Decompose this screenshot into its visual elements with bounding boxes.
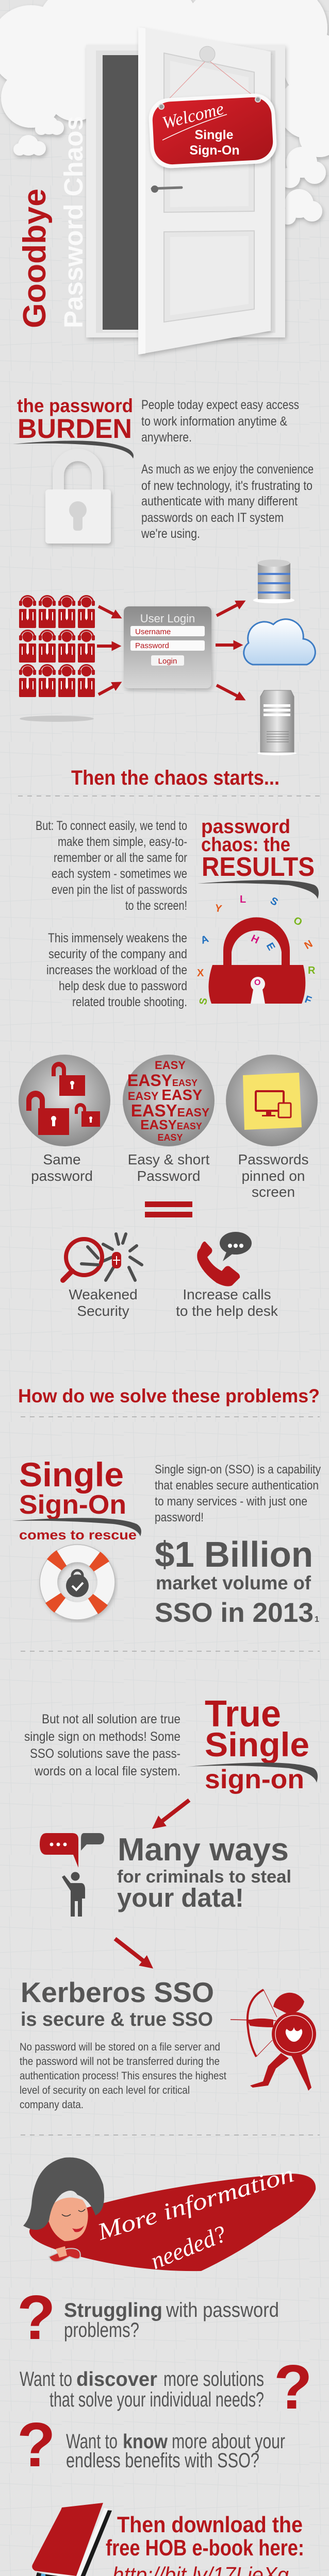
icon: red lock with letters: S xyxy=(268,895,280,908)
text: chaos explanation: This immensely weakens the xyxy=(48,931,187,945)
text: chaos explanation: related trouble shooting. xyxy=(72,995,187,1009)
title: Goodbye Password Chaos xyxy=(17,116,88,328)
text: chaos explanation: But: To connect easily, we tend to xyxy=(36,819,187,833)
heading: True Single sign-on: True xyxy=(205,1693,281,1735)
heading: True Single sign-on xyxy=(188,1693,318,1794)
text: password burden: People today expect easy access xyxy=(141,398,299,412)
banner: More information needed: needed? xyxy=(147,2221,230,2274)
icon: red lock with letters: E xyxy=(264,941,277,953)
heading: Many ways for criminals: for criminals to steal xyxy=(117,1867,291,1887)
labels: pinned on xyxy=(241,1168,305,1184)
icon: red lock with letters: X xyxy=(197,968,204,979)
banner: More information needed xyxy=(23,2157,316,2274)
heading: password chaos the RESULTS xyxy=(198,816,319,899)
icon: red lock with letters: F xyxy=(303,994,313,1007)
stat: $1 Billion: market volume of xyxy=(156,1572,311,1594)
text: chaos explanation: help desk due to password xyxy=(59,979,187,993)
stat: $1 Billion: 1 xyxy=(315,1615,319,1624)
icon: red e-book xyxy=(32,2503,112,2576)
icon: server xyxy=(257,690,297,755)
question: discover: more solutions xyxy=(163,2368,264,2391)
heading: Single Sign-On comes to rescue: Sign-On xyxy=(19,1490,126,1520)
text: not all solutions: words on a local file system. xyxy=(34,1764,180,1778)
login box: Login xyxy=(158,657,177,666)
heading: Single Sign-On comes to rescue xyxy=(12,1455,141,1543)
icon: red lock with letters: O xyxy=(254,978,260,987)
heading: True Single sign-on: sign-on xyxy=(205,1765,304,1794)
question: struggling: ? xyxy=(17,2282,56,2352)
question: struggling xyxy=(17,2282,279,2352)
text: password burden: to work information anytime & xyxy=(141,414,287,429)
heading: the password BURDEN: BURDEN xyxy=(18,414,132,444)
people grid xyxy=(19,596,95,722)
heading: True Single sign-on: Single xyxy=(205,1725,309,1764)
welcome sign: Sign-On xyxy=(189,143,240,158)
login box: Password xyxy=(135,641,169,650)
text: password burden: we're using. xyxy=(141,527,200,541)
icon: red lock with letters: N xyxy=(303,938,315,952)
call to action: download e-book xyxy=(106,2512,304,2576)
text: SSO definition: to many services - with just one xyxy=(155,1495,307,1509)
sign knob and strings xyxy=(161,46,258,107)
login box: Username xyxy=(135,628,171,636)
text: Kerberos explanation: No password will be stored on a file server and xyxy=(20,2041,220,2053)
arrows out of login xyxy=(216,603,241,698)
arrow: down-right xyxy=(115,1939,148,1964)
icon: easy words: EASYEASY xyxy=(140,1117,202,1132)
icon: red lock with letters: L xyxy=(240,894,246,905)
welcome sign xyxy=(148,93,277,169)
heading: Many ways for criminals xyxy=(117,1832,291,1912)
icon: easy words xyxy=(123,1055,215,1146)
text: Kerberos explanation: authentication process! This ensures the highest xyxy=(20,2070,226,2082)
labels: consequences xyxy=(69,1286,278,1319)
woman xyxy=(23,2157,104,2262)
clouds xyxy=(0,0,329,225)
welcome sign: Single xyxy=(194,128,234,142)
text: not all solutions xyxy=(24,1712,180,1778)
text: Kerberos explanation: the password will not be transferred during the xyxy=(20,2056,220,2067)
labels: consequences: Weakened xyxy=(69,1286,138,1302)
icon: red lock with letters xyxy=(197,894,316,1007)
question: know: Want to xyxy=(66,2430,118,2453)
icon: database xyxy=(253,560,294,603)
icon: red lock with letters: Y xyxy=(214,903,223,915)
labels: consequences: Increase calls xyxy=(183,1286,271,1302)
login box xyxy=(124,606,211,688)
icon: person with speech bubbles xyxy=(40,1833,104,1917)
heading: the password BURDEN xyxy=(13,395,134,459)
question: know xyxy=(17,2410,285,2480)
question: struggling: problems? xyxy=(64,2319,139,2342)
text: SSO definition xyxy=(155,1463,321,1524)
heading: Kerberos SSO: Kerberos SSO xyxy=(21,1976,214,2008)
call to action: download e-book: Then download the xyxy=(117,2512,303,2537)
door slab xyxy=(138,27,271,354)
icon: easy words: EASY xyxy=(155,1059,186,1072)
text: chaos explanation: remember or all the same for xyxy=(54,851,187,865)
icon: red lock with letters: O xyxy=(291,914,304,928)
heading: Many ways for criminals: your data! xyxy=(117,1883,244,1912)
stat: $1 Billion: SSO in 2013 xyxy=(155,1598,314,1628)
question: struggling: with password xyxy=(166,2299,279,2321)
icon: phone with speech bubble xyxy=(197,1232,252,1286)
heading: password chaos the RESULTS: chaos: the xyxy=(201,834,290,856)
icon: easy words: EASY EASY xyxy=(128,1087,202,1104)
text: not all solutions: single sign on methods! Some xyxy=(24,1730,180,1744)
text: chaos explanation: increases the workload of the xyxy=(46,963,187,977)
text: not all solutions: SSO solutions save the pass- xyxy=(30,1747,180,1761)
icon: red lock with letters: H xyxy=(249,933,261,946)
labels: consequences: to the help desk xyxy=(176,1303,278,1319)
door frame xyxy=(86,45,285,337)
equals sign xyxy=(145,1201,192,1217)
labels: Passwords xyxy=(238,1151,308,1167)
text: Kerberos explanation xyxy=(20,2041,226,2111)
text: chaos explanation xyxy=(36,819,187,1009)
icon: red lock with letters: R xyxy=(308,965,316,976)
question: know: know xyxy=(123,2431,168,2453)
heading: the password BURDEN: the password xyxy=(17,395,133,416)
icon: spartan archer xyxy=(231,1990,316,2091)
icon: weakened security (magnifier and bug) xyxy=(63,1234,142,1280)
icon: sticky note with monitor xyxy=(226,1055,318,1146)
text: password burden xyxy=(141,398,314,541)
text: chaos explanation: to the screen! xyxy=(125,899,187,913)
panel: three password habits xyxy=(19,1055,318,1200)
text: chaos explanation: make them simple, easy-to- xyxy=(58,835,187,849)
question: discover xyxy=(20,2352,312,2422)
text: password burden: authenticate with many different xyxy=(141,494,298,509)
question: discover: ? xyxy=(274,2352,312,2422)
heading: Single Sign-On comes to rescue: Single xyxy=(19,1455,124,1494)
heading: Then the chaos starts: Then the chaos starts... xyxy=(71,767,279,789)
icon: red lock with letters: A xyxy=(199,933,210,946)
heading: Many ways for criminals: Many ways xyxy=(118,1832,289,1868)
title: Goodbye Password Chaos: Password Chaos xyxy=(59,116,88,328)
question: know: ? xyxy=(17,2410,56,2480)
icon: red lock with letters: S xyxy=(198,997,210,1006)
text: password burden: anywhere. xyxy=(141,430,192,445)
icon: cloud xyxy=(244,619,315,665)
icon: easy words: EASYEASY xyxy=(131,1101,209,1120)
labels: password xyxy=(31,1168,93,1184)
icon: lifebuoy xyxy=(40,1545,115,1620)
text: password burden: passwords on each IT system xyxy=(141,511,284,525)
hero: clouds and door xyxy=(0,0,329,354)
heading: password chaos the RESULTS: RESULTS xyxy=(202,852,315,882)
title: Goodbye Password Chaos: Goodbye xyxy=(17,189,53,328)
heading: Single Sign-On comes to rescue: comes to rescue xyxy=(19,1527,137,1543)
labels: consequences: Security xyxy=(77,1303,129,1319)
stat: $1 Billion: $1 Billion xyxy=(155,1534,313,1574)
question: discover: Want to xyxy=(20,2368,72,2391)
text: chaos explanation: even pin the list of passwords xyxy=(52,883,187,897)
text: Kerberos explanation: company data. xyxy=(20,2099,84,2111)
text: Kerberos explanation: level of security on each level for critical xyxy=(20,2084,190,2096)
heading: password chaos the RESULTS: password xyxy=(201,816,290,838)
login box: User Login xyxy=(140,612,195,625)
heading: How do we solve these problems: How do we solve these problems? xyxy=(18,1385,320,1406)
labels xyxy=(31,1151,308,1200)
labels: Password xyxy=(137,1168,200,1184)
question: discover: discover xyxy=(76,2368,157,2391)
icon: easy words: EASYEASY xyxy=(127,1071,198,1090)
stat: $1 Billion xyxy=(155,1534,319,1628)
icon: same password locks xyxy=(19,1055,110,1146)
banner: More information needed: More information xyxy=(94,2160,297,2245)
labels: Same xyxy=(43,1151,81,1167)
heading: Kerberos SSO xyxy=(21,1976,214,2030)
icon: padlock xyxy=(45,449,111,544)
text: chaos explanation: each system - sometimes we xyxy=(52,867,187,881)
text: SSO definition: password! xyxy=(155,1511,204,1524)
icon: easy words: EASY xyxy=(157,1132,183,1143)
text: not all solutions: But not all solution are true xyxy=(42,1712,180,1726)
question: know: endless benefits with SSO? xyxy=(66,2449,259,2472)
arrows into login xyxy=(97,606,118,694)
labels: Easy & short xyxy=(128,1151,210,1167)
arrow: down-left xyxy=(157,1800,189,1825)
text: chaos explanation: security of the company and xyxy=(48,947,187,961)
heading: Kerberos SSO: is secure & true SSO xyxy=(21,2009,213,2030)
question: struggling: Struggling xyxy=(64,2299,162,2321)
welcome sign: Welcome xyxy=(160,99,226,133)
question: know: more about your xyxy=(172,2430,285,2453)
labels: screen xyxy=(252,1184,295,1200)
